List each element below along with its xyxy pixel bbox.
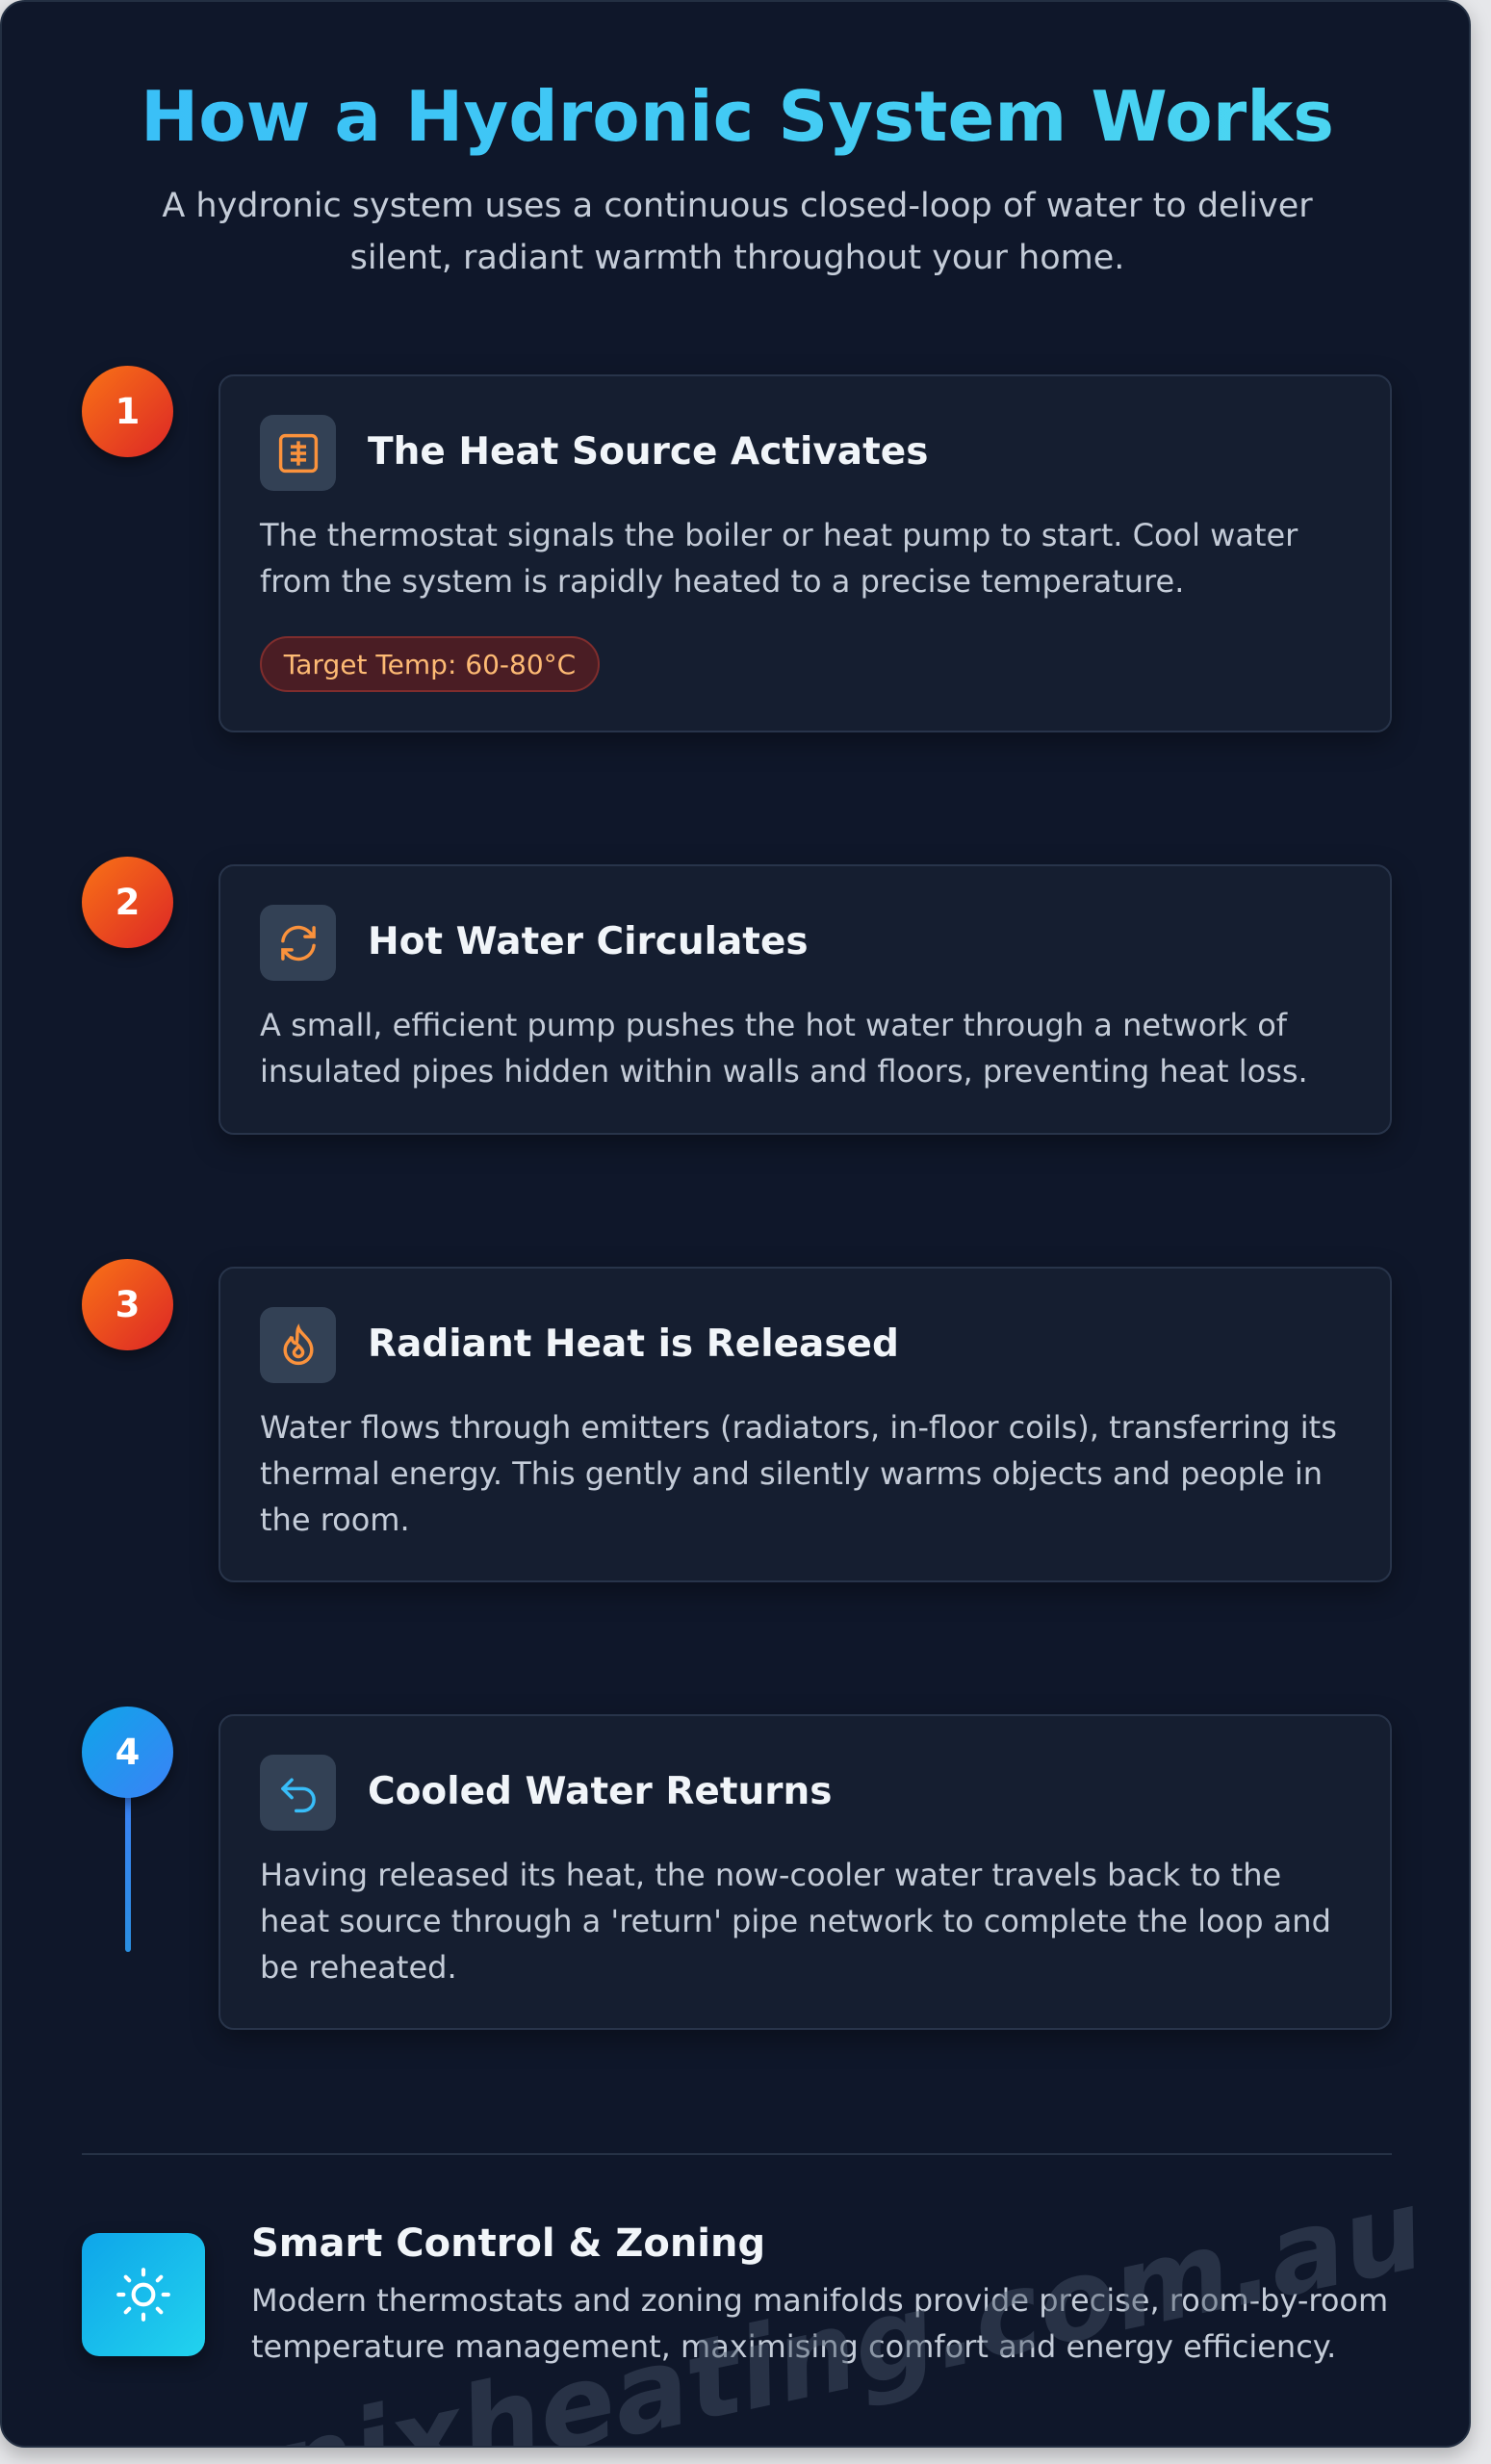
heading: Hot Water Circulates <box>368 920 809 963</box>
pill: target temp: Target Temp: 60-80°C <box>284 649 576 680</box>
connector line <box>125 1792 131 1952</box>
body: Modern thermostats and zoning manifolds provide precise, room-by-room temperature management, maximising comfort and energy efficiency. <box>251 2282 1388 2365</box>
step 4 number: 4 <box>116 1732 140 1773</box>
icon: return arrow <box>260 1755 336 1831</box>
card: circulates <box>219 864 1392 1135</box>
icon: flame <box>260 1307 336 1383</box>
pill: target temp <box>260 636 600 692</box>
card: returns <box>219 1714 1392 2030</box>
icon: cycle <box>260 905 336 981</box>
subtitle: A hydronic system uses a continuous closed-loop of water to deliver silent, radiant warmth throughout your home. <box>162 187 1313 277</box>
heading: Smart Control & Zoning <box>251 2221 765 2266</box>
smart control section <box>82 2221 1388 2365</box>
heading: The Heat Source Activates <box>368 430 928 474</box>
card: radiant heat <box>219 1267 1392 1582</box>
card: heat source <box>219 374 1392 732</box>
icon: heater <box>260 415 336 491</box>
body: The thermostat signals the boiler or heat pump to start. Cool water from the system is rapidly heated to a precise temperature. <box>260 517 1298 600</box>
icon: sun <box>82 2233 205 2356</box>
step 1 number: 1 <box>116 391 140 432</box>
heading: Radiant Heat is Released <box>368 1322 899 1366</box>
heading: Cooled Water Returns <box>368 1770 832 1813</box>
step 1 number <box>82 366 173 457</box>
step 3 number: 3 <box>116 1284 140 1325</box>
body: A small, efficient pump pushes the hot water through a network of insulated pipes hidden within walls and floors, preventing heat loss. <box>260 1007 1308 1090</box>
body: Having released its heat, the now-cooler water travels back to the heat source through a 'return' pipe network to complete the loop and be reheated. <box>260 1857 1331 1986</box>
step 2 number: 2 <box>116 882 140 923</box>
step 2 number <box>82 857 173 948</box>
step 4 number <box>82 1707 173 1798</box>
title: How a Hydronic System Works <box>141 76 1334 157</box>
body: Water flows through emitters (radiators, in-floor coils), transferring its thermal energy. This gently and silently warms objects and people in the room. <box>260 1409 1337 1538</box>
step 3 number <box>82 1259 173 1350</box>
